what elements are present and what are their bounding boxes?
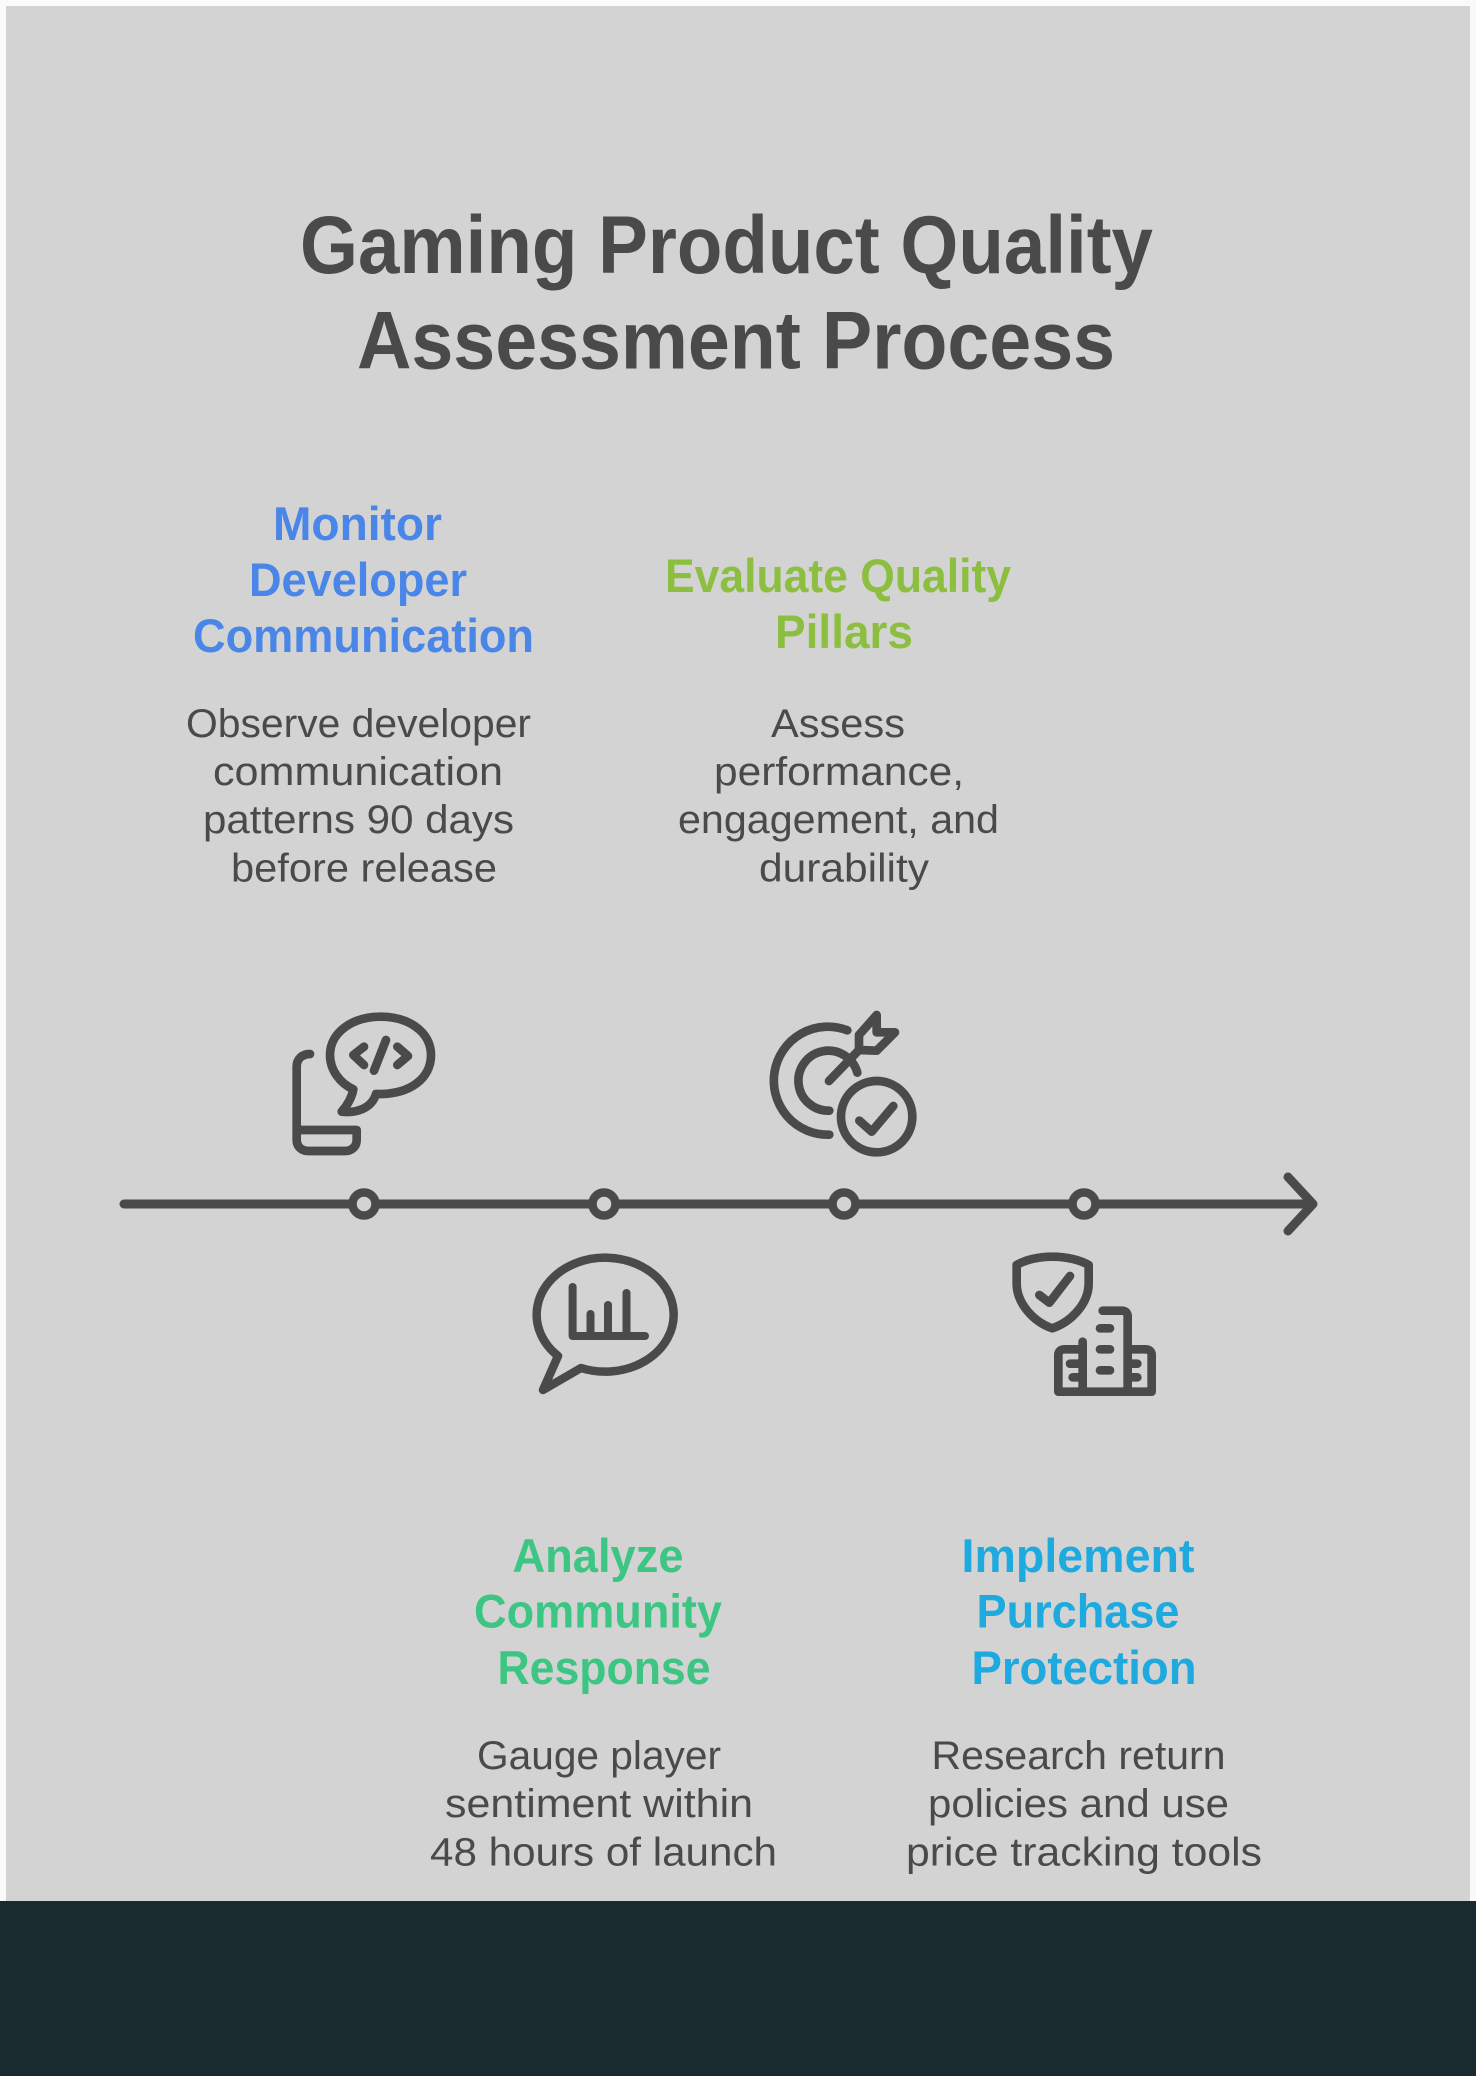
marker 2: [592, 1192, 616, 1216]
icon: phone with code speech bubble: [297, 1017, 431, 1151]
step 3 description: performance,: [714, 750, 964, 794]
timeline line: [124, 1200, 1312, 1208]
icon: speech bubble with bar chart: [537, 1258, 674, 1390]
step 1 description: [186, 702, 531, 890]
step 4 heading: Implement Purchase Protection: [962, 1529, 1196, 1694]
icon: target with arrow and check mark: [774, 1015, 912, 1152]
step 4 description: [906, 1734, 1262, 1874]
step 3 heading: Evaluate Quality Pillars: Pillars: [775, 605, 913, 658]
step 1 heading: Monitor Developer Communication: Developer: [249, 553, 467, 606]
title: Assessment Process: [357, 296, 1115, 386]
step 4 description: policies and use: [928, 1782, 1229, 1826]
step 1 description: communication: [213, 750, 503, 794]
step 4 description: Research return: [932, 1734, 1226, 1778]
title: Gaming Product Quality: [300, 200, 1153, 291]
footer band: [0, 1901, 1476, 2076]
step 1 description: patterns 90 days: [203, 798, 514, 842]
step 1 heading: Monitor Developer Communication: [193, 497, 534, 662]
step 3 description: [678, 702, 999, 890]
step 2 description: [430, 1734, 777, 1874]
step 2 heading: Analyze Community Response: Response: [498, 1641, 710, 1694]
icon: shield with check and buildings: [1017, 1257, 1152, 1392]
step 3 heading: Evaluate Quality Pillars: [665, 549, 1011, 658]
step 1 description: Observe developer: [186, 702, 531, 746]
step 2 heading: Analyze Community Response: [474, 1529, 722, 1694]
timeline arrow with step markers: [124, 1177, 1313, 1231]
step 4 heading: Implement Purchase Protection: Protection: [972, 1641, 1196, 1694]
step 2 description: sentiment within: [445, 1782, 753, 1826]
arrow head: [1288, 1177, 1313, 1231]
step 1 description: before release: [231, 846, 497, 890]
step 2 description: Gauge player: [477, 1734, 721, 1778]
step 4 heading: Implement Purchase Protection: Implement: [962, 1529, 1195, 1582]
step 2 heading: Analyze Community Response: Community: [474, 1584, 722, 1638]
title: [300, 200, 1153, 386]
step 3 description: engagement, and: [678, 798, 999, 842]
step 2 heading: Analyze Community Response: Analyze: [512, 1529, 684, 1582]
step 4 description: price tracking tools: [906, 1830, 1262, 1874]
step 3 description: Assess: [771, 702, 905, 746]
marker 1: [352, 1192, 376, 1216]
step 2 description: 48 hours of launch: [430, 1830, 777, 1874]
step 3 heading: Evaluate Quality Pillars: Evaluate Quality: [665, 549, 1011, 602]
step 4 heading: Implement Purchase Protection: Purchase: [976, 1584, 1180, 1638]
marker 4: [1072, 1192, 1096, 1216]
step 3 description: durability: [759, 846, 929, 890]
marker 3: [832, 1192, 856, 1216]
step 1 heading: Monitor Developer Communication: Communication: [193, 609, 534, 662]
step 1 heading: Monitor Developer Communication: Monitor: [273, 497, 442, 550]
